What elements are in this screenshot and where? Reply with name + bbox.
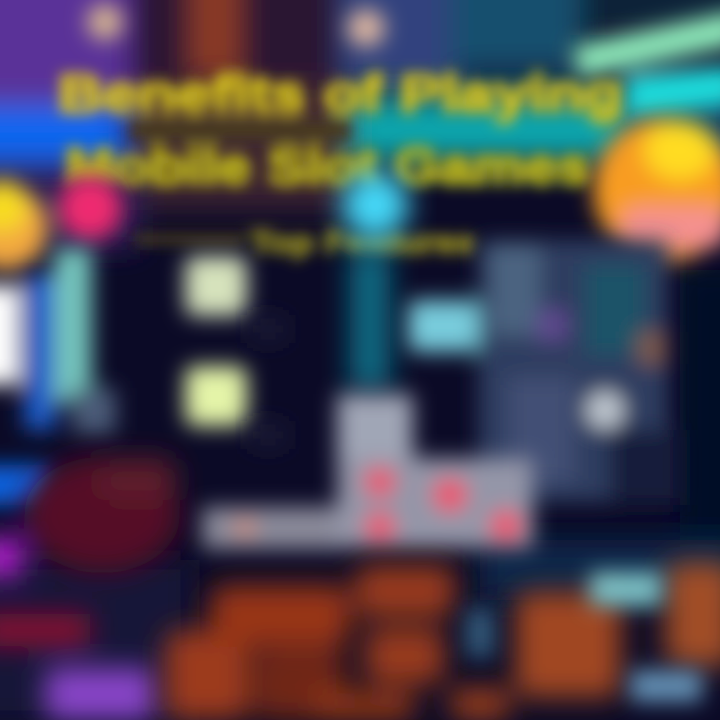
couch left — [0, 457, 180, 720]
right screen panel — [408, 240, 680, 505]
badge: orange emblem right — [593, 118, 720, 262]
left emblem and pink light — [0, 176, 122, 270]
left machine columns — [0, 248, 116, 505]
feature text placeholder blocks — [250, 322, 286, 442]
subtitle: Top Features — [250, 224, 476, 260]
decorative ceiling lights — [87, 4, 385, 47]
subtitle — [135, 224, 476, 260]
neon bands top right — [572, 10, 720, 118]
cyan glow under title — [341, 171, 409, 390]
foreground cyan lights — [465, 572, 702, 702]
title — [58, 64, 623, 196]
slot reels panel — [202, 394, 533, 549]
title: Mobile Slot Games — [65, 138, 590, 196]
feature icon: pale square 2 — [185, 366, 247, 426]
foreground orange seats — [165, 562, 720, 720]
title: Benefits of Playing — [58, 64, 623, 124]
feature icon: pale square 1 — [185, 256, 247, 316]
